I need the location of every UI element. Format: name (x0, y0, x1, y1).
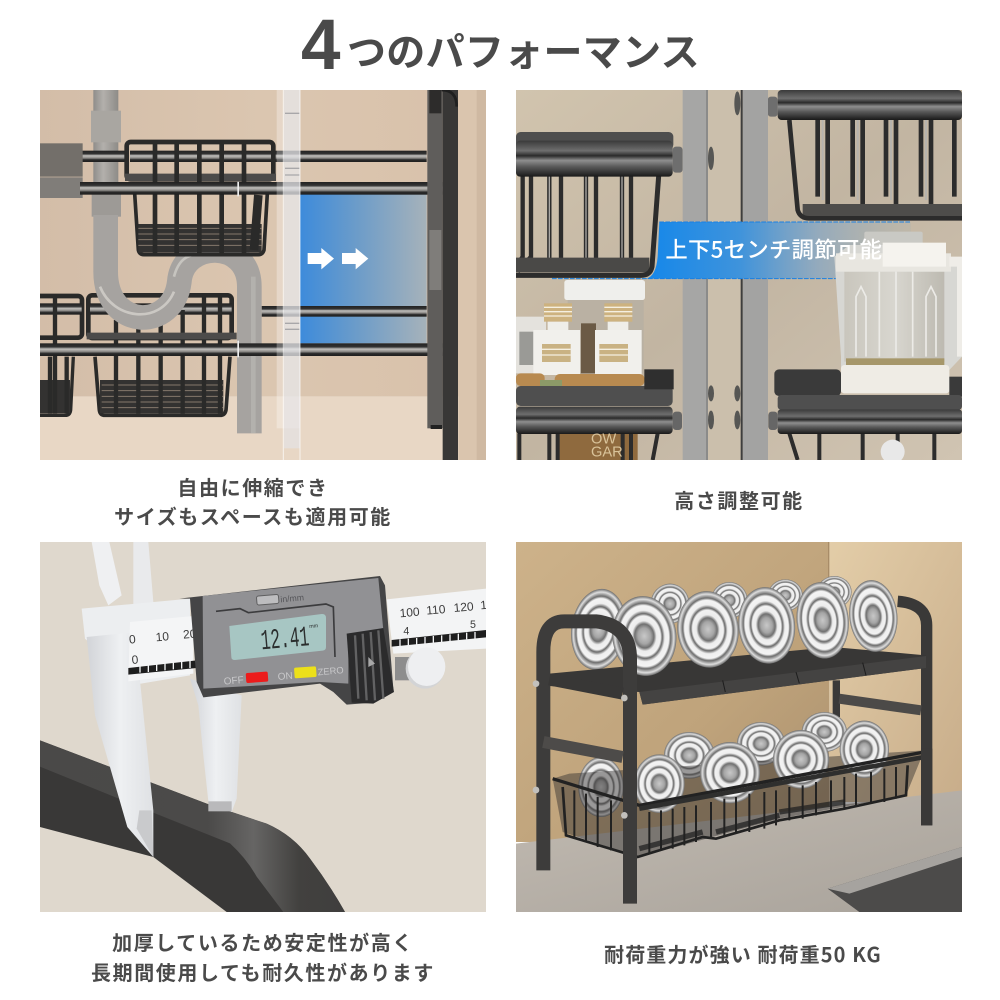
main beam (82, 599, 190, 685)
thumb wheel (395, 647, 445, 689)
bottom basket floor (553, 750, 924, 857)
grey uprights (683, 90, 768, 460)
blue stretch area (300, 193, 427, 343)
button labels: ON (277, 671, 293, 683)
title (301, 6, 700, 85)
caption: extendable (114, 472, 392, 530)
panel: load capacity photo (516, 542, 962, 912)
thick metal tube (40, 740, 345, 912)
floor (40, 397, 486, 460)
top shelf (549, 647, 926, 705)
ruler numbers: 0 (128, 632, 137, 647)
ruler numbers: 120 (453, 599, 475, 615)
sink (828, 847, 962, 912)
sliding lower jaw (190, 679, 242, 812)
front rod upper (80, 182, 443, 195)
ruler numbers: 5 (470, 619, 476, 631)
digital display body: in/mm (280, 592, 304, 604)
back dumbbells bottom (578, 712, 847, 817)
button labels (223, 665, 344, 688)
sugar label: OW (591, 431, 616, 447)
wall (516, 90, 962, 460)
lower left contents (516, 280, 645, 460)
ruler left (128, 616, 197, 681)
upper jaws (92, 542, 180, 622)
blender (834, 232, 962, 393)
front frame (543, 621, 927, 904)
ruler numbers: 0 (131, 652, 139, 667)
upper basket (125, 142, 276, 255)
fixed lower jaw (87, 632, 153, 857)
caption: thickness: 長期間使用しても耐久性があります (91, 957, 435, 986)
digital display body (179, 576, 394, 705)
back rods left (40, 143, 127, 198)
label text: 上下5センチ調節可能 (665, 233, 882, 265)
ruler numbers: 20 (182, 627, 197, 642)
icon: double arrows (308, 248, 368, 269)
sugar label (591, 431, 623, 461)
screws (533, 680, 628, 819)
LCD screen: mm (309, 623, 319, 630)
drain trap pipe (100, 215, 253, 433)
button labels: OFF (223, 675, 244, 688)
back legs and rails (833, 601, 927, 825)
LCD screen: 12.41 (260, 621, 311, 658)
caption: extendable: サイズもスペースも適用可能 (114, 501, 392, 530)
caption: extendable: 自由に伸縮でき (177, 472, 329, 501)
ruler numbers: 110 (426, 602, 446, 618)
ruler numbers: 100 (399, 605, 421, 620)
wall (40, 90, 486, 397)
panel: extendable width photo (40, 90, 486, 460)
ruler numbers (128, 598, 488, 667)
caption: thickness (91, 927, 435, 986)
background (40, 542, 486, 912)
lower left basket (33, 296, 82, 415)
back rods right (262, 151, 427, 317)
drain pipe top (91, 90, 121, 217)
front dumbbells bottom (634, 721, 889, 813)
ruler numbers: 4 (403, 626, 409, 638)
bottom basket (553, 752, 924, 857)
bolts (708, 91, 740, 429)
counter (516, 790, 962, 912)
title: つのパフォーマンス (347, 22, 700, 78)
caption: thickness: 加厚しているため安定性が高く (112, 927, 414, 956)
wall (516, 542, 829, 842)
right cabinet edge (458, 90, 486, 460)
button labels: ZERO (317, 665, 344, 677)
ruler right (387, 589, 486, 654)
lower main basket (87, 295, 237, 415)
translucent slider (277, 90, 300, 460)
lower right basket (768, 369, 962, 464)
caption: height adjustable: 高さ調整可能 (674, 485, 804, 514)
LCD screen (229, 614, 326, 660)
upper right basket (768, 90, 962, 218)
title: 4 (301, 6, 340, 85)
blue label band (552, 222, 911, 279)
right upright frame (427, 90, 458, 460)
back dumbbells top (566, 576, 852, 673)
front dumbbells top (608, 578, 901, 679)
upper left basket (516, 132, 683, 275)
ruler numbers: 10 (155, 629, 170, 644)
panel: height adjustment photo (516, 90, 962, 460)
caption: load capacity: 耐荷重力が強い 耐荷重50 KG (604, 939, 882, 968)
front rod lower (40, 343, 443, 356)
panel: thickness caliper photo (40, 542, 486, 912)
wall between uprights (708, 90, 743, 460)
lower left basket (516, 369, 682, 460)
